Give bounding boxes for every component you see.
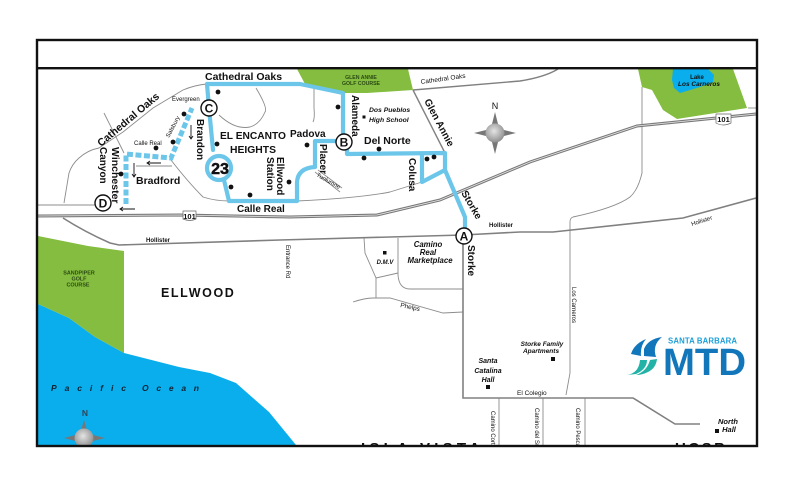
stop marker C — [201, 100, 217, 116]
compass rose north — [474, 101, 516, 154]
labels: minor streets: Hollister — [489, 223, 514, 229]
labels: minor streets: Camino del Sur — [533, 408, 539, 449]
labels: landmarks: D.M.V — [377, 260, 394, 266]
labels: route streets: Padova — [290, 129, 326, 140]
labels: minor streets: Calle Real — [134, 141, 162, 147]
labels: landmarks: Apartments — [522, 348, 559, 355]
labels: minor streets: Los Carneros — [570, 287, 576, 323]
labels: landmarks: Storke Family — [521, 341, 564, 348]
logo: Santa Barbara MTD: MTD — [663, 342, 746, 384]
labels: landmarks: Camino — [414, 240, 443, 249]
labels: route streets: Bradford — [136, 175, 180, 187]
labels: route streets: Brandon — [194, 119, 205, 160]
labels: route streets: Station — [264, 157, 275, 191]
labels: landmarks: GLEN ANNIE — [345, 75, 377, 81]
stop marker B — [336, 134, 352, 150]
labels: route streets: Winchester — [109, 147, 121, 204]
labels: route streets: Ellwood — [274, 157, 285, 195]
bus stops — [119, 90, 436, 197]
labels: minor streets: Cathedral Oaks — [420, 73, 467, 86]
highway shield west: 101 — [183, 212, 196, 221]
labels: route streets: ISLA VISTA — [361, 440, 480, 457]
labels: landmarks: Real — [420, 248, 437, 257]
direction arrows — [120, 125, 193, 211]
labels: minor streets: Evergreen — [172, 97, 200, 103]
labels: landmarks: High School — [369, 117, 409, 124]
labels: landmarks: Ocean — [142, 383, 199, 393]
highway shield east: 101 — [717, 115, 730, 124]
labels: route streets — [95, 71, 725, 457]
map area — [38, 69, 756, 460]
logo: Santa Barbara MTD — [627, 337, 744, 375]
labels: route streets: EL ENCANTO — [220, 130, 286, 142]
labels: landmarks: GOLF — [72, 276, 87, 282]
route number 23: 23 — [211, 161, 229, 178]
lake: Lake Los Carneros — [672, 69, 714, 93]
ocean: Pacific Ocean — [38, 304, 296, 447]
labels: landmarks — [51, 75, 738, 434]
stop marker C: C — [205, 102, 214, 116]
labels: landmarks: Pacific — [51, 383, 126, 393]
park: Sandpiper Golf Course — [38, 236, 124, 353]
logo: Santa Barbara MTD: SANTA BARBARA — [668, 336, 737, 346]
labels: minor streets: El Colegio — [517, 390, 547, 397]
compass rose north: N — [492, 101, 498, 111]
labels: route streets: Canyon — [97, 147, 108, 184]
labels: route streets: Storke — [458, 189, 484, 222]
labels: route streets: Alameda — [349, 95, 360, 137]
stop marker D — [95, 195, 111, 211]
labels: landmarks: Los Carneros — [678, 81, 720, 88]
labels: route streets: ELLWOOD — [161, 286, 235, 300]
park: Glen Annie Golf Course — [297, 69, 413, 93]
stop marker B: B — [340, 136, 349, 150]
highway 101 — [38, 114, 756, 217]
labels: landmarks: SANDPIPER — [63, 270, 95, 276]
labels: landmarks: Hall — [722, 425, 737, 434]
bus route 23 dashed section — [126, 108, 192, 204]
bus route 23 solid line — [207, 84, 465, 230]
labels: route streets: Colusa — [406, 158, 417, 192]
labels: landmarks: Santa — [478, 358, 498, 365]
labels: route streets: Storke — [465, 245, 476, 277]
compass rose south: N — [82, 408, 88, 418]
labels: minor streets: Phelps — [400, 302, 421, 313]
stop marker A: A — [460, 230, 469, 244]
stop marker D: D — [99, 196, 108, 210]
title bar rule — [37, 67, 757, 69]
labels: landmarks: COURSE — [66, 282, 90, 288]
labels: landmarks: North — [718, 417, 738, 426]
stop marker A — [456, 228, 472, 244]
labels: route streets: UCSB — [675, 440, 725, 457]
labels: landmarks: Marketplace — [407, 256, 453, 265]
labels: minor streets: Hollister — [691, 215, 713, 228]
frame border — [37, 40, 757, 446]
labels: route streets: Cathedral Oaks — [95, 90, 162, 149]
minor roads — [38, 84, 756, 447]
labels: landmarks: GOLF COURSE — [342, 81, 381, 87]
labels: route streets: Del Norte — [364, 135, 411, 147]
labels: minor streets: Tuolumne — [315, 173, 341, 191]
park: Lake Los Carneros grounds — [638, 69, 747, 119]
labels: landmarks: Catalina — [474, 368, 502, 375]
labels: landmarks: Hall — [482, 377, 495, 384]
labels: route streets: Cathedral Oaks — [205, 71, 282, 83]
highway shield east — [716, 114, 731, 125]
labels: route streets: HEIGHTS — [230, 144, 276, 156]
labels: route streets: Calle Real — [237, 204, 285, 215]
labels: minor streets: Salsbury — [165, 116, 182, 139]
major roads — [63, 69, 756, 424]
labels: route streets: Glen Annie — [421, 97, 456, 149]
labels: minor streets: Camino Pescadero — [574, 408, 580, 460]
labels: minor streets: Hollister — [146, 238, 171, 244]
compass rose south — [64, 410, 105, 445]
labels: landmarks: Lake — [690, 75, 704, 81]
labels: minor streets: Camino Corto — [489, 411, 495, 449]
labels: route streets: Placer — [317, 144, 328, 174]
labels: landmarks: Dos Pueblos — [369, 107, 410, 114]
labels: minor streets: Entrance Rd — [284, 245, 290, 278]
labels: minor streets — [134, 73, 713, 460]
